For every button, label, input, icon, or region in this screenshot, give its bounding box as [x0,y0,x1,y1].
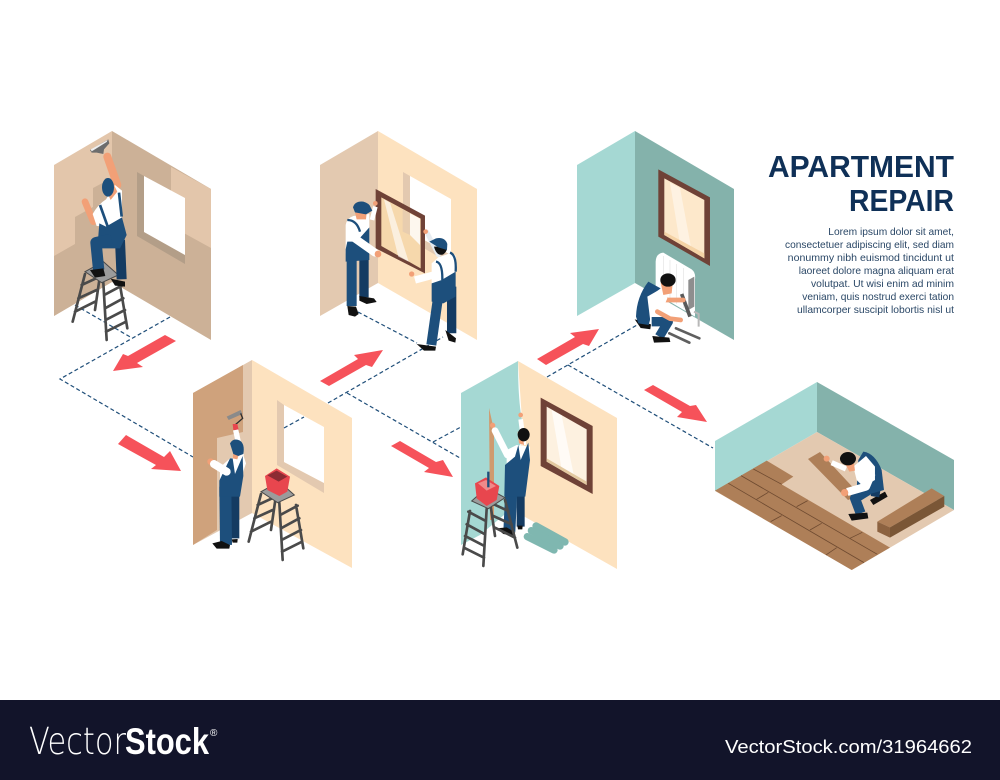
right wall [252,360,352,568]
right worker far arm [427,232,438,255]
ladder [463,488,517,566]
wrenches [669,328,699,343]
title: REPAIR [849,183,954,218]
right wall [518,361,617,569]
footer image id: VectorStock.com/31964662 [725,737,972,757]
step 6: laying the floor [715,382,954,570]
plank being placed [808,452,860,500]
dashed path seen through window [284,417,304,428]
description text: laoreet dolore magna aliquam erat [799,266,954,277]
bucket with brush [475,472,499,506]
dashed process path [60,305,713,458]
worker at radiator [635,273,683,343]
window opening [137,172,185,264]
right worker [409,229,456,351]
paint bucket [265,468,290,496]
arrow: step 1 to step 4 down-left [113,335,176,371]
footer bar [0,700,1000,780]
description text: veniam, quis nostrud exerci tation [802,292,954,303]
right wall unplastered area [171,167,211,248]
description text: ullamcorper suscipit lobortis nisl ut [797,305,954,316]
left wall with wallpaper [461,361,522,545]
description text: Lorem ipsum dolor sit amet, [828,227,954,238]
arrow: step 5 to step 3 [537,329,599,365]
worker plastering [85,139,127,287]
painted area [193,365,243,545]
window opening [277,400,324,493]
step 1: plastering the wall [54,131,211,340]
right wall [378,131,477,340]
worker hanging wallpaper [490,413,530,536]
step 4: painting the wall [193,360,352,568]
wallpaper strip handle [489,408,494,520]
window frame carried by workers [376,189,425,273]
ladder [249,482,303,560]
title: APARTMENT [768,149,954,184]
ladder [73,262,127,340]
arrow: into step 5 [391,441,453,477]
arrow: into step 4 [118,435,181,471]
left wall [577,131,635,316]
description text [785,227,954,316]
step 3: repairing the radiator [577,131,734,343]
arrow: step 4 to step 2 [320,350,383,386]
right wall [112,131,211,340]
left wall [193,360,252,545]
left wall [54,131,112,316]
window [658,169,710,266]
step 2: installing the window [320,131,477,351]
left worker [346,201,381,317]
right wall [817,382,954,510]
window [541,398,593,494]
title [768,149,954,218]
description text: volutpat. Ut wisi enim ad minim [811,279,954,290]
floor base [715,432,954,570]
radiator with pipes [656,253,699,327]
window opening [403,172,451,264]
worker with roller [207,410,246,549]
right wall [635,131,734,340]
footer logo: ® [210,728,218,739]
plank stack [877,488,944,538]
laid wood planks [715,461,890,570]
footer logo [29,720,218,763]
left wall plaster patch [54,178,112,316]
left wall [320,131,378,316]
footer logo: Vector [29,720,127,763]
description text: nonummy nibh euismod tincidunt ut [788,253,954,264]
description text: consectetuer adipiscing elit, sed diam [785,240,954,251]
footer logo: Stock [125,721,209,762]
left wall [715,382,817,491]
worker laying floor [824,452,888,521]
arrow: step 3 to step 6 [644,385,707,422]
step 5: hanging wallpaper [461,361,617,569]
wallpaper rolls [527,526,565,550]
